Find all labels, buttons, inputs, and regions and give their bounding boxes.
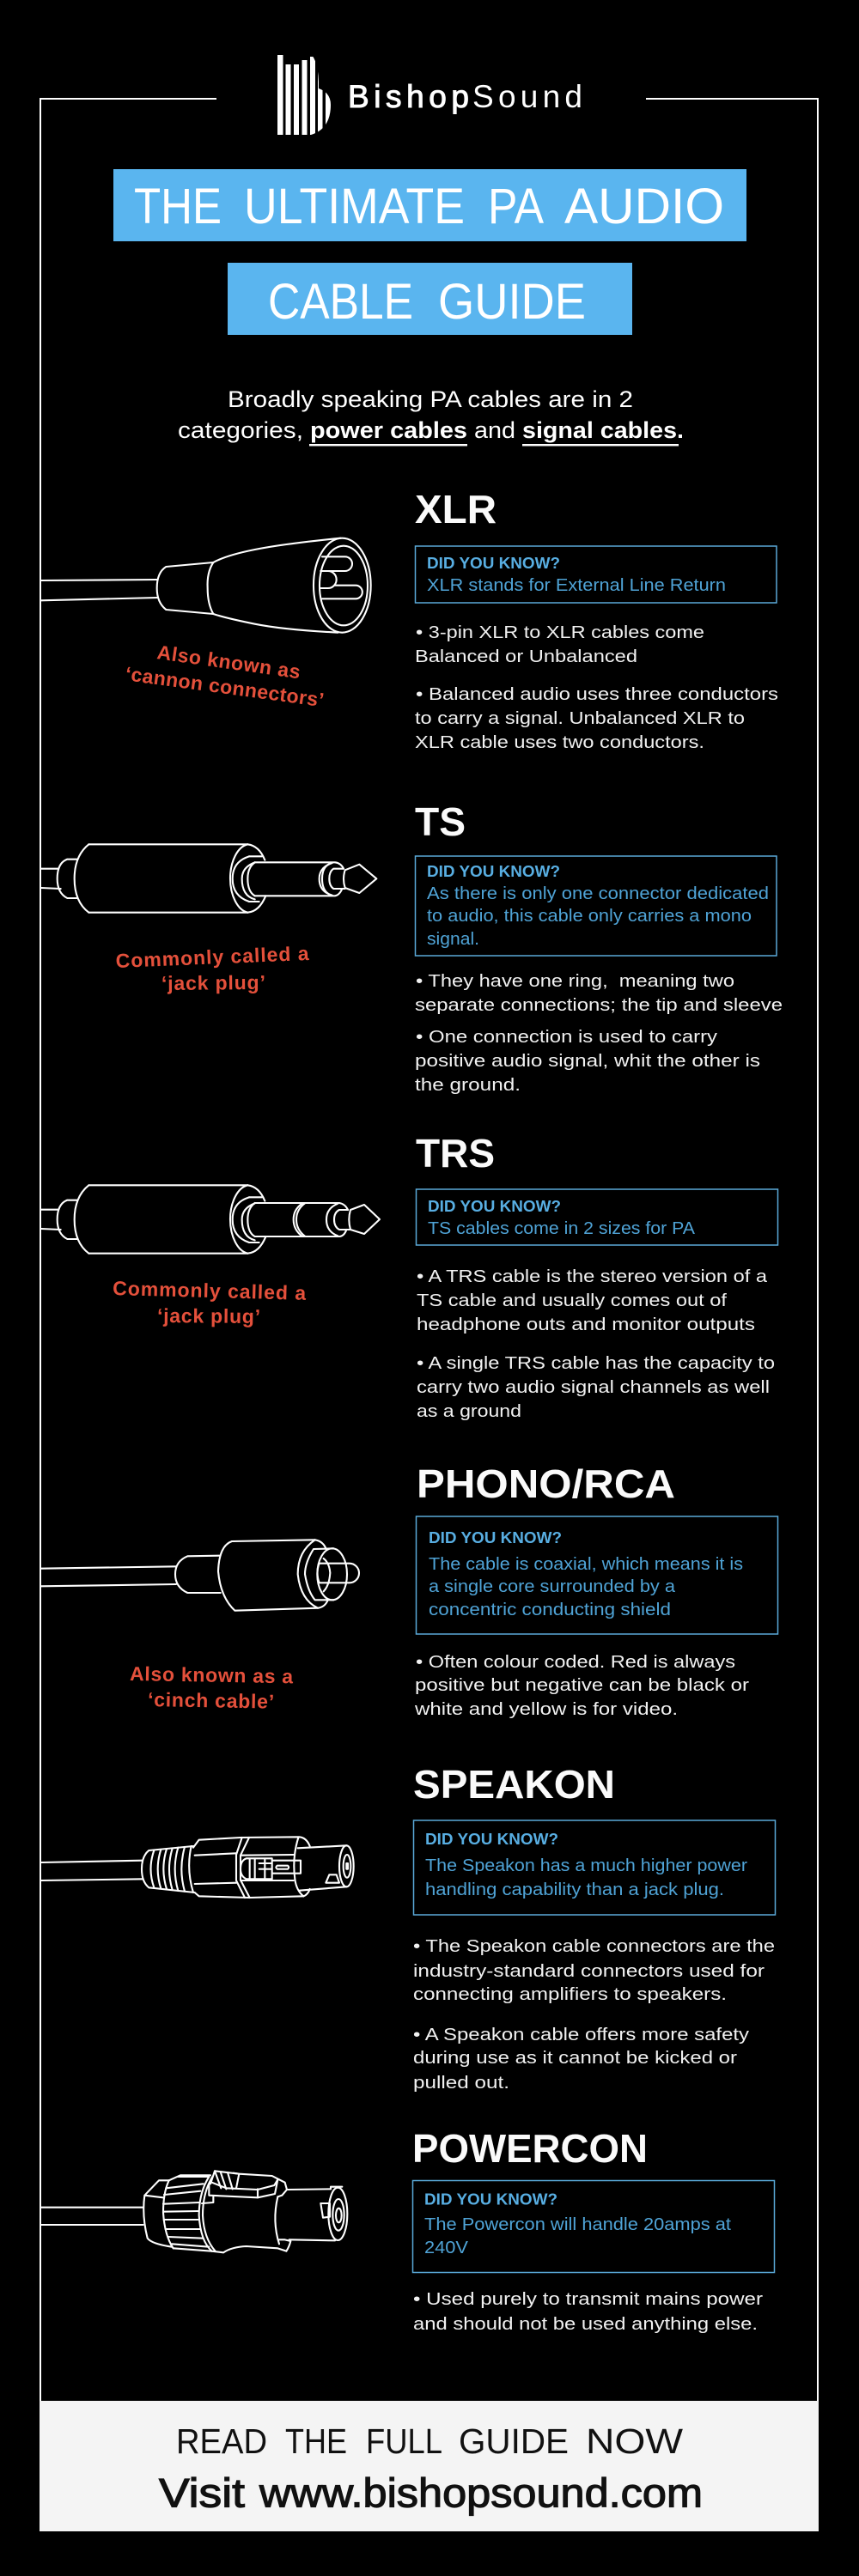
bullet points: positive but negative can be black or — [415, 1675, 749, 1695]
did you know box: The Speakon has a much higher power — [425, 1856, 747, 1875]
bullet points: XLR cable uses two conductors. — [415, 732, 704, 752]
bullet points: Balanced or Unbalanced — [415, 647, 637, 666]
caption — [124, 641, 326, 711]
did you know box — [416, 546, 777, 603]
heading: PHONO/RCA — [417, 1461, 675, 1506]
bullet points: • A Speakon cable offers more safety — [413, 2025, 750, 2044]
did you know box: concentric conducting shield — [429, 1600, 671, 1619]
footer call to action: Visit — [159, 2470, 245, 2516]
bullet points: • One connection is used to carry — [416, 1027, 718, 1047]
did you know box: 240V — [424, 2238, 468, 2257]
logo: BishopSound — [277, 52, 582, 135]
did you know box — [414, 1820, 775, 1915]
caption — [113, 1277, 307, 1327]
bullet points — [414, 1652, 749, 1719]
title: ULTIMATE — [244, 179, 465, 234]
did you know box: DID YOU KNOW? — [428, 1197, 561, 1215]
did you know box: DID YOU KNOW? — [427, 554, 560, 572]
bullet points: connecting amplifiers to speakers. — [413, 1984, 727, 2004]
title: GUIDE — [438, 274, 586, 330]
bullet points: • 3-pin XLR to XLR cables come — [416, 623, 704, 642]
bullet points: • A TRS cable is the stereo version of a — [417, 1267, 768, 1286]
did you know box — [416, 856, 777, 956]
icon: Powercon connector — [41, 2171, 347, 2252]
caption: Also known as a — [130, 1662, 294, 1687]
panel: TS — [41, 799, 783, 1095]
footer call to action: GUIDE — [459, 2421, 569, 2461]
wordmark — [348, 79, 582, 114]
icon: RCA connector — [41, 1540, 359, 1611]
footer call to action: FULL — [366, 2421, 442, 2461]
did you know box: DID YOU KNOW? — [425, 1830, 558, 1848]
panel: PHONO/RCA — [41, 1461, 777, 1719]
did you know box: TS cables come in 2 sizes for PA — [428, 1218, 695, 1238]
panel: TRS — [41, 1131, 777, 1421]
did you know box: The cable is coaxial, which means it is — [429, 1554, 743, 1574]
bullet points: separate connections; the tip and sleeve — [415, 995, 783, 1015]
bullet points: • Used purely to transmit mains power — [413, 2289, 763, 2309]
bullet points: as a ground — [417, 1401, 521, 1421]
heading: TRS — [416, 1131, 495, 1176]
caption: ‘cinch cable’ — [148, 1688, 274, 1713]
did you know box: to audio, this cable only carries a mono — [427, 906, 752, 926]
bullet points: • Balanced audio uses three conductors — [416, 684, 778, 704]
did you know box: As there is only one connector dedicated — [427, 884, 769, 903]
intro text: categories, — [178, 417, 303, 443]
title — [113, 169, 746, 335]
wordmark: Bishop — [348, 79, 469, 114]
bullet points: pulled out. — [413, 2073, 509, 2093]
caption: ‘jack plug’ — [161, 971, 265, 994]
panel: XLR — [41, 487, 778, 752]
bullet points: headphone outs and monitor outputs — [417, 1315, 755, 1334]
caption: Commonly called a — [113, 1277, 307, 1304]
did you know box: signal. — [427, 929, 479, 949]
caption — [115, 942, 309, 994]
heading: TS — [415, 799, 466, 844]
footer call to action: READ — [176, 2421, 267, 2461]
bullet points: white and yellow is for video. — [414, 1699, 678, 1719]
caption: Also known as — [155, 641, 302, 683]
title: THE — [134, 179, 222, 234]
footer call to action: NOW — [586, 2421, 683, 2461]
did you know box — [416, 1516, 778, 1634]
bullet points: and should not be used anything else. — [413, 2314, 758, 2334]
intro text: Broadly speaking PA cables are in 2 — [228, 386, 633, 412]
heading: XLR — [415, 487, 497, 532]
footer call to action: www.bishopsound.com — [259, 2470, 703, 2516]
bullet points: • The Speakon cable connectors are the — [413, 1936, 775, 1956]
bullet points: to carry a signal. Unbalanced XLR to — [415, 708, 745, 728]
panel: POWERCON — [41, 2126, 774, 2334]
icon: striped B mark — [277, 52, 331, 135]
bullet points: carry two audio signal channels as well — [417, 1377, 770, 1397]
did you know box: handling capability than a jack plug. — [425, 1880, 724, 1899]
icon: XLR connector — [41, 538, 371, 633]
title: AUDIO — [564, 179, 724, 234]
did you know box: a single core surrounded by a — [429, 1577, 676, 1596]
bullet points — [413, 2289, 763, 2334]
intro text: and — [474, 417, 515, 443]
title: PA — [488, 179, 544, 234]
did you know box: The Powercon will handle 20amps at — [424, 2215, 731, 2234]
panel: SPEAKON — [41, 1762, 775, 2093]
did you know box: DID YOU KNOW? — [429, 1528, 562, 1546]
caption: ‘jack plug’ — [157, 1304, 260, 1327]
icon: TRS jack plug — [41, 1185, 380, 1254]
heading: SPEAKON — [413, 1762, 615, 1807]
bullet points — [415, 623, 778, 752]
intro text: signal cables. — [522, 417, 684, 443]
icon: Speakon connector — [41, 1837, 354, 1898]
intro text — [178, 386, 684, 447]
footer call to action — [40, 2401, 819, 2531]
icon: TS jack plug — [41, 844, 376, 913]
bullet points: industry-standard connectors used for — [413, 1961, 765, 1981]
caption: ‘cannon connectors’ — [124, 662, 326, 711]
did you know box: XLR stands for External Line Return — [427, 575, 726, 595]
bullet points: TS cable and usually comes out of — [417, 1291, 727, 1310]
bullet points: • A single TRS cable has the capacity to — [417, 1353, 775, 1373]
caption: Commonly called a — [115, 942, 309, 972]
bullet points — [417, 1267, 775, 1421]
did you know box — [416, 1189, 778, 1245]
bullet points: during use as it cannot be kicked or — [413, 2048, 737, 2068]
footer call to action: THE — [285, 2421, 347, 2461]
heading: POWERCON — [412, 2126, 648, 2171]
bullet points: the ground. — [415, 1075, 521, 1095]
bullet points — [413, 1936, 775, 2093]
did you know box: DID YOU KNOW? — [427, 862, 560, 880]
bullet points — [415, 971, 783, 1095]
wordmark: Sound — [472, 79, 582, 114]
bullet points: positive audio signal, whit the other is — [415, 1051, 760, 1071]
bullet points: • Often colour coded. Red is always — [416, 1652, 735, 1672]
bullet points: • They have one ring, meaning two — [416, 971, 734, 991]
title: CABLE — [268, 274, 413, 330]
caption — [130, 1662, 294, 1713]
did you know box — [412, 2181, 775, 2272]
did you know box: DID YOU KNOW? — [424, 2190, 557, 2208]
intro text: power cables — [310, 417, 467, 443]
